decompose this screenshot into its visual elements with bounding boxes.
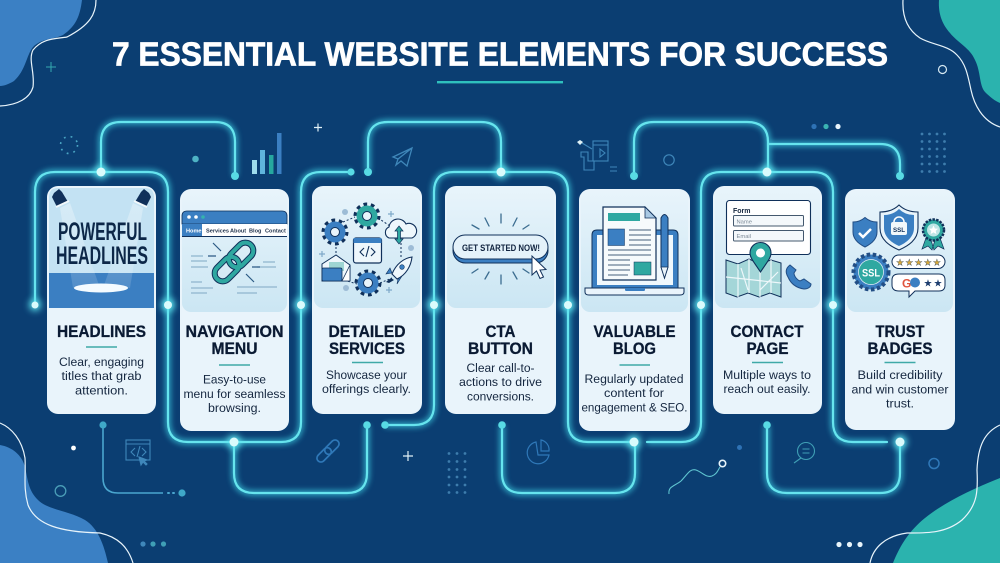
description: engagement & SEO.: [582, 400, 688, 414]
heading: BADGES: [868, 340, 932, 358]
squiggle with ring: [669, 460, 726, 494]
illustration: browser nav with chain link: Contact: [265, 228, 286, 234]
description: attention.: [75, 384, 128, 398]
heading: BLOG: [613, 340, 656, 358]
illustration: shields, SSL seal and ratings: G: [902, 276, 911, 290]
icon: media player: [577, 140, 617, 171]
connector nodes: [29, 165, 907, 497]
illustration: get started button with cursor: [453, 214, 548, 284]
icon: chat bubble: [794, 442, 814, 463]
illustration: browser nav with chain link: Blog: [249, 228, 262, 234]
icon: pie chart: [527, 440, 549, 464]
heading: DETAILED: [328, 323, 406, 341]
description: menu for seamless: [184, 387, 286, 401]
heading: NAVIGATION: [186, 323, 284, 341]
heading: HEADLINES: [57, 323, 146, 341]
blob: top left: [0, 0, 96, 106]
heading: PAGE: [746, 340, 788, 358]
blob: bottom right: [870, 425, 1000, 563]
heading: [186, 323, 284, 358]
illustration: shields, SSL seal and ratings: ★★: [924, 278, 943, 290]
illustration: powerful headlines spotlight: POWERFUL: [58, 218, 147, 246]
illustration: shields, SSL seal and ratings: ★★★★★: [896, 258, 941, 268]
blob: top right: [903, 0, 1000, 127]
illustration: get started button with cursor: GET STARTED NOW!: [462, 242, 540, 253]
icon: bar chart: [252, 133, 282, 174]
illustration: form, map pin and phone: [726, 200, 811, 297]
illustration: form, map pin and phone: Name: [736, 220, 752, 226]
heading: [730, 323, 804, 358]
heading: SERVICES: [329, 340, 405, 358]
heading: [868, 323, 932, 358]
illustration: browser nav with chain link: Home: [186, 228, 202, 234]
card 1: headlines: [47, 186, 156, 414]
heading: BUTTON: [468, 340, 533, 358]
description: titles that grab: [62, 369, 142, 383]
description: Easy-to-use: [203, 372, 266, 386]
icon: paper plane: [393, 148, 412, 166]
illustration: powerful headlines spotlight: HEADLINES: [56, 242, 148, 270]
description: Clear call-to-: [466, 361, 534, 375]
blob: bottom left: [0, 423, 133, 563]
description: [59, 355, 144, 398]
description: conversions.: [467, 390, 534, 404]
heading: TRUST: [876, 323, 924, 341]
illustration: shields, SSL seal and ratings: SSL: [893, 227, 905, 234]
description: [459, 361, 542, 404]
illustration: browser nav with chain link: Services: [206, 228, 229, 234]
description: [322, 368, 411, 396]
heading: CTA: [486, 323, 516, 341]
description: Regularly updated: [584, 372, 684, 386]
illustration: form, map pin and phone: Email: [736, 234, 751, 240]
description: Clear, engaging: [59, 355, 144, 369]
title: 7 ESSENTIAL WEBSITE ELEMENTS FOR SUCCESS: [112, 36, 888, 72]
description: [582, 372, 688, 414]
heading: [468, 323, 533, 358]
card 5: valuable blog: [579, 189, 690, 431]
description: [852, 368, 948, 410]
illustration: form, map pin and phone: Form: [733, 208, 750, 215]
description: [723, 368, 811, 396]
description: trust.: [886, 396, 914, 410]
decorative sparks, circles and dots: [46, 62, 948, 547]
illustration: shields, SSL seal and ratings: [853, 205, 945, 297]
description: content for: [604, 386, 664, 400]
card 3: detailed services: [312, 186, 422, 414]
illustration: powerful headlines spotlight: [49, 188, 154, 308]
illustration: shields, SSL seal and ratings: SSL: [862, 268, 880, 280]
icon: chain link: [315, 438, 341, 464]
description: Showcase your: [326, 368, 407, 382]
description: Build credibility: [858, 368, 943, 382]
illustration: browser nav with chain link: About: [230, 228, 246, 234]
description: browsing.: [208, 401, 261, 415]
card 6: contact page: [713, 186, 822, 414]
illustration: gears, cloud, envelope and rocket: [319, 204, 417, 294]
heading: [594, 323, 676, 358]
description: Multiple ways to: [723, 368, 811, 382]
title underline: [437, 81, 563, 83]
description: offerings clearly.: [322, 382, 411, 396]
card 2: navigation menu: [180, 189, 289, 431]
icon: code window with cursor: [126, 440, 150, 465]
card 7: trust badges: [845, 189, 955, 430]
illustration: blog article on laptop: [585, 207, 684, 295]
heading: MENU: [212, 340, 258, 358]
neon connector network: [35, 122, 900, 493]
description: and win customer: [852, 382, 948, 396]
heading: [328, 323, 406, 358]
description: [184, 372, 286, 415]
heading: CONTACT: [730, 323, 804, 341]
heading: VALUABLE: [594, 323, 676, 341]
description: actions to drive: [459, 375, 542, 389]
description: reach out easily.: [724, 382, 810, 396]
illustration: browser nav with chain link: [182, 211, 287, 293]
card 4: CTA button: [445, 186, 556, 414]
